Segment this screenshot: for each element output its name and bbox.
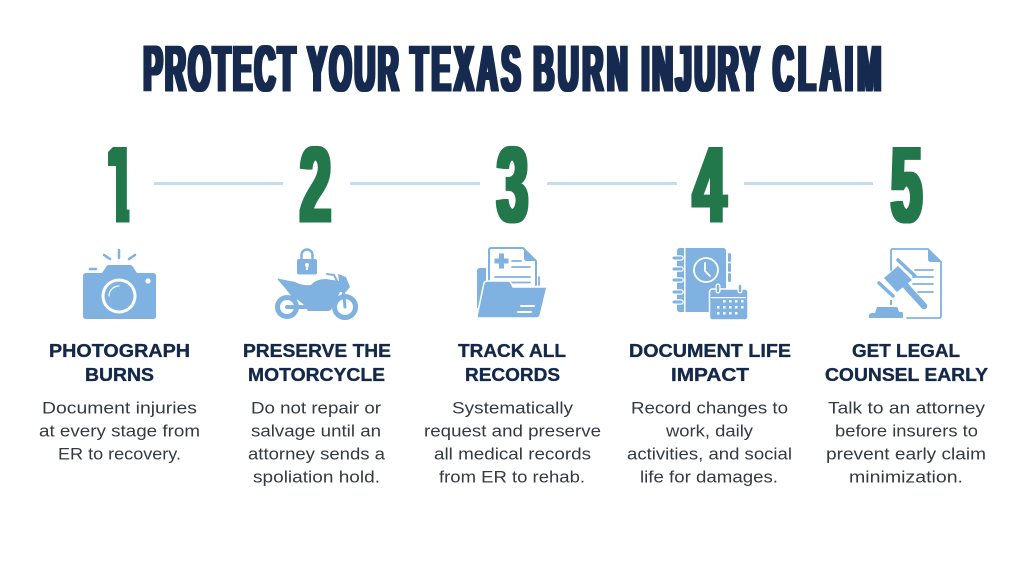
icon: notebook with clock and calendar xyxy=(674,248,748,320)
number 4: 4 xyxy=(693,124,726,244)
step 1 column xyxy=(39,124,200,464)
icon: medical records folder xyxy=(477,248,547,318)
step 3 column xyxy=(424,124,601,486)
heading xyxy=(243,341,391,385)
heading: RECORDS xyxy=(465,365,560,385)
description: Document injuries xyxy=(42,398,197,418)
description: activities, and social xyxy=(627,444,792,464)
description: work, daily xyxy=(665,422,754,440)
description: spoliation hold. xyxy=(253,468,380,486)
number 5: 5 xyxy=(891,124,922,244)
description: Systematically xyxy=(452,398,574,418)
heading xyxy=(49,341,190,385)
title: PROTECT xyxy=(144,33,295,105)
description: minimization. xyxy=(849,468,963,486)
description: prevent early claim xyxy=(826,444,986,464)
description: before insurers to xyxy=(835,422,978,440)
heading: COUNSEL EARLY xyxy=(825,365,988,385)
heading: TRACK ALL xyxy=(458,341,566,361)
heading: BURNS xyxy=(85,365,154,385)
heading: MOTORCYCLE xyxy=(248,365,385,385)
icon: motorcycle with lock xyxy=(278,250,356,318)
title: INJURY xyxy=(642,33,759,105)
title: CLAIM xyxy=(773,33,881,105)
description: all medical records xyxy=(434,444,591,464)
title xyxy=(144,33,881,105)
number 1: 1 xyxy=(99,124,137,244)
description xyxy=(248,398,386,486)
heading: GET LEGAL xyxy=(852,341,960,361)
icon: camera xyxy=(83,250,156,319)
description: from ER to rehab. xyxy=(439,468,585,486)
title: TEXAS xyxy=(410,33,521,105)
description: at every stage from xyxy=(39,422,200,440)
number 3: 3 xyxy=(497,124,528,244)
heading xyxy=(458,341,566,385)
description: Record changes to xyxy=(631,398,788,418)
description: Talk to an attorney xyxy=(828,398,986,418)
heading: PHOTOGRAPH xyxy=(49,341,190,361)
heading: PRESERVE THE xyxy=(243,341,391,361)
description: life for damages. xyxy=(640,468,778,486)
title: YOUR xyxy=(308,33,399,105)
heading xyxy=(825,341,988,385)
step 5 column xyxy=(825,124,988,486)
heading: DOCUMENT LIFE xyxy=(629,341,791,361)
description: salvage until an xyxy=(251,422,381,440)
description xyxy=(627,398,792,486)
description: ER to recovery. xyxy=(58,444,181,464)
number 2: 2 xyxy=(300,124,331,244)
step connector lines xyxy=(154,182,873,185)
step 2 column xyxy=(243,124,391,486)
description: request and preserve xyxy=(424,422,601,440)
step 4 column xyxy=(627,124,792,486)
description xyxy=(39,398,200,464)
description: Do not repair or xyxy=(251,398,381,418)
title: BURN xyxy=(534,33,628,105)
heading: IMPACT xyxy=(671,365,749,385)
icon: gavel and legal document xyxy=(869,249,941,318)
heading xyxy=(629,341,791,385)
description: attorney sends a xyxy=(248,444,386,464)
description xyxy=(424,398,601,486)
description xyxy=(826,398,986,486)
